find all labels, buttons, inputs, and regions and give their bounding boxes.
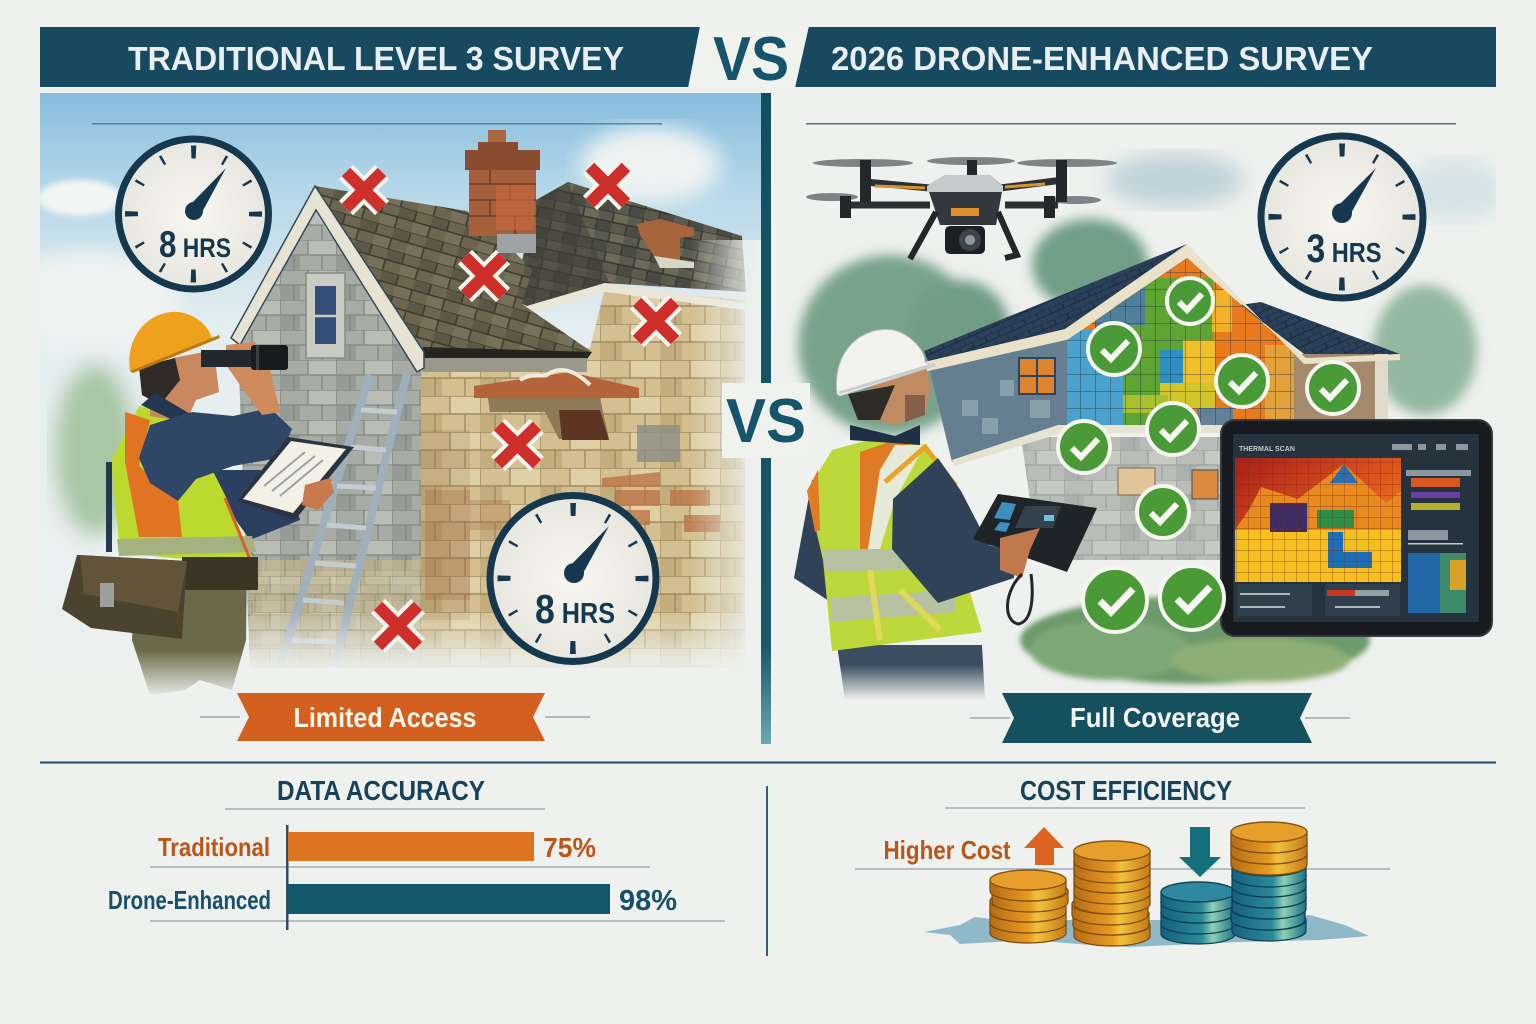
- chimney: [465, 130, 540, 253]
- hand: [1000, 528, 1040, 578]
- chart heading: COST EFFICIENCY: [1020, 775, 1232, 806]
- hair: [139, 358, 180, 399]
- drone: [806, 157, 1117, 259]
- house illustration: [231, 130, 746, 670]
- fades over house: [693, 240, 761, 666]
- x mark: [590, 167, 626, 203]
- tablet with thermal view: [1221, 420, 1492, 636]
- background trees: [798, 219, 1477, 435]
- check: [1216, 355, 1268, 407]
- x mark: [346, 172, 382, 208]
- left wing wall: [929, 336, 1067, 462]
- center VS label: VS: [726, 387, 806, 456]
- wall stains: [425, 490, 510, 600]
- check: [1147, 403, 1199, 455]
- binoculars: [201, 345, 288, 370]
- chart: cost efficiency: [855, 775, 1390, 947]
- banner: limited access: [200, 693, 590, 741]
- sleeve: [139, 408, 292, 501]
- thermal grid: [1060, 258, 1300, 438]
- green check marks: [1058, 278, 1359, 632]
- collar: [141, 393, 188, 419]
- rear fascia: [527, 283, 745, 314]
- house with heat overlay: [924, 244, 1400, 560]
- coin stack: orange tall: [1072, 841, 1150, 946]
- cable: [1007, 574, 1032, 624]
- right wall: [1294, 354, 1388, 420]
- rear roof: [513, 182, 746, 306]
- clock: 3 hrs: 3 HRS: [1306, 227, 1382, 271]
- camera: [945, 226, 985, 254]
- head: [870, 362, 931, 425]
- clock: 8 hrs top: [118, 139, 268, 289]
- satchel: [62, 555, 187, 639]
- shrubs: [1020, 596, 1370, 684]
- clock: 3 hrs: [1261, 136, 1423, 298]
- rear right roof: [1240, 302, 1400, 357]
- strap: [106, 462, 112, 552]
- center divider with VS: [722, 93, 810, 744]
- main roof: [315, 186, 592, 360]
- broken bricks: [602, 472, 720, 532]
- left title: TRADITIONAL LEVEL 3 SURVEY: [128, 40, 624, 77]
- banner: full coverage: Full Coverage: [1070, 702, 1240, 733]
- chart heading: DATA ACCURACY: [277, 775, 485, 806]
- ladder: [279, 373, 407, 668]
- arrow down: [1179, 827, 1221, 877]
- surveyor with controller: [794, 330, 1097, 700]
- brick wall: [421, 288, 745, 670]
- legs: [132, 590, 247, 695]
- drone-enhanced bar: [108, 884, 677, 917]
- collar: [850, 425, 920, 445]
- x mark: [637, 302, 675, 340]
- window: [1019, 358, 1055, 394]
- check: [1137, 486, 1189, 538]
- traditional bar: Traditional: [158, 832, 270, 862]
- rotors: [806, 157, 1117, 204]
- banner: full coverage: [970, 693, 1350, 743]
- arm: [892, 458, 1014, 603]
- clock: 8 hrs top: 8 HRS: [159, 224, 231, 265]
- barge boards: [231, 186, 424, 372]
- red cross marks: [346, 167, 675, 646]
- clock: 8 hrs bottom: [490, 496, 656, 662]
- ground shadow: [924, 915, 1369, 947]
- clipboard: [237, 437, 354, 520]
- lower stone wall: [1021, 437, 1225, 560]
- coin stack: orange short: [990, 870, 1068, 943]
- vest: [111, 406, 256, 566]
- legs: [837, 645, 985, 700]
- header bar: [40, 25, 1496, 94]
- motors: [840, 160, 1067, 218]
- gable trim: [924, 244, 1400, 372]
- check: [1160, 566, 1224, 630]
- banner: limited access: Limited Access: [294, 702, 476, 733]
- higher cost label: Higher Cost: [884, 835, 1011, 865]
- coin stack: teal tall with orange top: [1231, 822, 1307, 941]
- legs: [910, 212, 1017, 259]
- dormer: [637, 219, 694, 268]
- small wall window: [637, 425, 680, 462]
- clock: 8 hrs bottom: 8 HRS: [535, 586, 615, 632]
- eave shadow: [423, 347, 592, 359]
- floor trim: [952, 425, 1225, 466]
- left sleeve: [794, 480, 840, 603]
- hand: [302, 478, 334, 510]
- right title: 2026 DRONE-ENHANCED SURVEY: [831, 40, 1373, 77]
- controller: [973, 494, 1097, 572]
- vest: [807, 437, 982, 651]
- chart: data accuracy: [108, 775, 725, 930]
- check: [1307, 362, 1359, 414]
- body behind clipboard: [214, 470, 300, 539]
- drone-enhanced bar: Drone-Enhanced: [108, 885, 271, 915]
- head: [150, 350, 219, 422]
- fade on legs: [136, 652, 242, 695]
- lower windows: [1118, 468, 1218, 499]
- check: [1088, 323, 1140, 375]
- tablet with thermal view: THERMAL SCAN: [1239, 446, 1295, 453]
- x mark: [498, 426, 537, 464]
- surveyor with binoculars: [62, 312, 354, 698]
- forearm: [226, 342, 280, 415]
- thermal image: [1235, 458, 1401, 582]
- VS badge: VS: [713, 25, 789, 94]
- x mark: [378, 606, 418, 646]
- check: [1058, 421, 1110, 473]
- left roof: [924, 244, 1195, 364]
- panel: drone-enhanced survey: [771, 93, 1505, 745]
- panel: traditional survey: [0, 93, 762, 745]
- check: [1083, 568, 1147, 632]
- hair: [848, 385, 895, 420]
- arms: [843, 180, 1063, 205]
- stone gable wall: [238, 212, 421, 670]
- tool belt: [182, 557, 258, 590]
- white hard hat: [836, 330, 934, 396]
- drone-enhanced bar: 98%: [619, 885, 677, 917]
- arrow up: [1024, 827, 1064, 865]
- damaged ledge: [474, 370, 639, 440]
- check: [1167, 278, 1213, 324]
- x mark: [465, 257, 503, 295]
- body: [927, 175, 1003, 225]
- traditional bar: [158, 832, 596, 863]
- gable window: [306, 273, 345, 358]
- coin stack: teal short: [1161, 882, 1235, 944]
- fade on legs: [830, 665, 995, 700]
- hard hat: [129, 312, 219, 371]
- VS badge: [688, 25, 809, 94]
- traditional bar: 75%: [543, 832, 596, 863]
